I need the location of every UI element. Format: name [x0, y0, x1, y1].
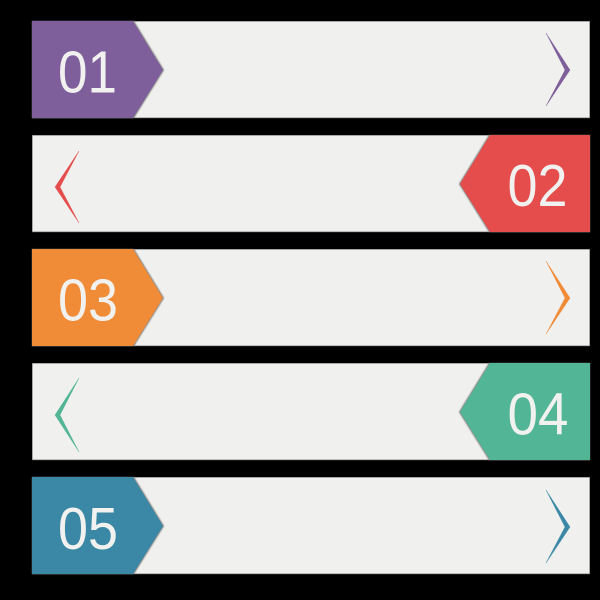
icon: right chevron: [546, 33, 570, 106]
icon: right chevron: [546, 261, 570, 334]
panel: banner 01 background: [32, 21, 590, 118]
tag shadow 04: [459, 363, 590, 460]
tag shadow 05: [32, 477, 164, 574]
panel: banner 05 background: [32, 477, 590, 574]
banner 04: [32, 363, 590, 460]
tag: 03: [32, 249, 163, 346]
icon: left chevron: [55, 378, 79, 452]
number 02: 02: [508, 153, 568, 219]
tag shadow 03: [32, 249, 164, 346]
banner 05: [32, 477, 590, 574]
banner 03: [32, 249, 590, 346]
number 01: 01: [58, 40, 117, 106]
panel: banner 04 background: [32, 363, 590, 460]
tag shadow 02: [459, 135, 590, 232]
number 04: 04: [508, 382, 568, 448]
tag: 02: [460, 135, 590, 232]
number 03: 03: [58, 268, 118, 334]
panel: banner 03 background: [32, 249, 590, 346]
icon: right chevron: [546, 490, 570, 563]
tag: 04: [460, 363, 590, 460]
tag: 01: [32, 21, 163, 118]
banner 02: [32, 135, 590, 232]
number 05: 05: [58, 496, 118, 562]
tag shadow 01: [32, 21, 164, 118]
icon: left chevron: [55, 151, 79, 223]
banner 01: [32, 21, 590, 118]
panel: banner 02 background: [32, 135, 590, 232]
tag: 05: [32, 477, 163, 574]
